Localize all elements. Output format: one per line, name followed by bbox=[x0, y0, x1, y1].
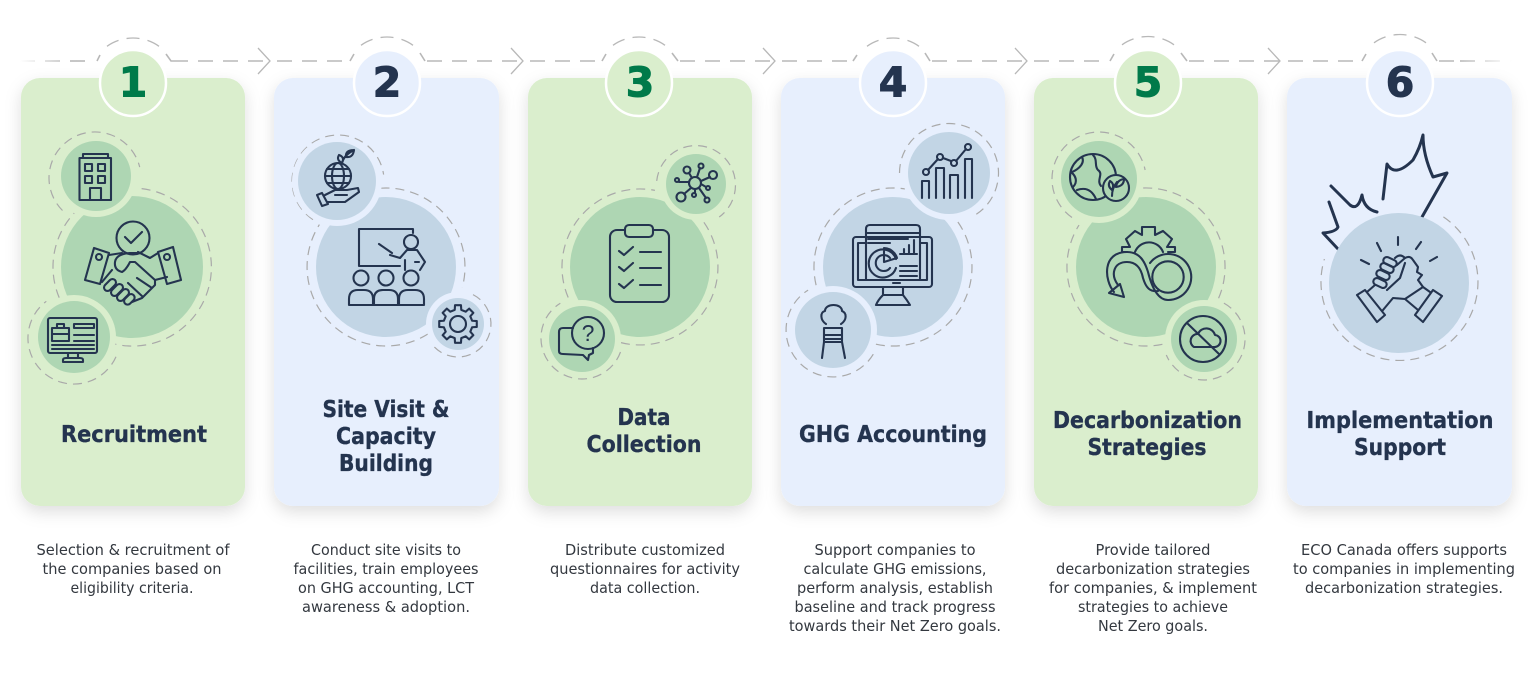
title: Site Visit & Capacity Building: Building bbox=[339, 451, 433, 477]
description: step 6: ECO Canada offers supports bbox=[1301, 541, 1507, 559]
description: step 1 bbox=[36, 541, 230, 597]
description: step 4: calculate GHG emissions, bbox=[804, 560, 986, 578]
step number 5: 5 bbox=[1134, 58, 1162, 106]
description: step 4: Support companies to bbox=[814, 541, 976, 559]
description: step 1: eligibility criteria. bbox=[70, 579, 194, 597]
icon cluster: handshake, building, job monitor bbox=[28, 132, 211, 384]
step number 4 bbox=[860, 50, 926, 116]
step number 3: 3 bbox=[626, 58, 654, 106]
description: step 5: Net Zero goals. bbox=[1098, 617, 1208, 635]
description: step 6 bbox=[1293, 541, 1515, 597]
description: step 3: questionnaires for activity bbox=[550, 560, 740, 578]
description: step 5: Provide tailored bbox=[1096, 541, 1210, 559]
description: step 2: facilities, train employees bbox=[294, 560, 479, 578]
description: step 2: Conduct site visits to bbox=[311, 541, 461, 559]
title: Data Collection: Collection bbox=[586, 432, 702, 458]
step number 2 bbox=[354, 50, 420, 116]
title: Data Collection bbox=[586, 405, 702, 458]
step number 4: 4 bbox=[879, 58, 907, 106]
description: step 6: to companies in implementing bbox=[1293, 560, 1515, 578]
step number 1: 1 bbox=[119, 58, 147, 106]
icon cluster: presenter, globe in hand, gear bbox=[292, 135, 491, 357]
panel: step 6 implementation support bbox=[1287, 50, 1512, 506]
title: Implementation Support: Support bbox=[1354, 435, 1446, 461]
description: step 3: data collection. bbox=[590, 579, 700, 597]
description: step 3: Distribute customized bbox=[565, 541, 725, 559]
panel: step 3 data collection bbox=[528, 50, 752, 506]
description: step 5: strategies to achieve bbox=[1078, 598, 1228, 616]
icon cluster: gear loop, leaf globe, no cloud bbox=[1052, 132, 1245, 380]
description: step 6: decarbonization strategies. bbox=[1305, 579, 1503, 597]
description: step 2 bbox=[294, 541, 479, 616]
step number 5 bbox=[1115, 50, 1181, 116]
description: step 5: for companies, & implement bbox=[1049, 579, 1257, 597]
title: Data Collection: Data bbox=[618, 405, 670, 431]
icon cluster: clipboard, network, question chat bbox=[541, 146, 735, 379]
title: Decarbonization Strategies: Strategies bbox=[1088, 435, 1206, 461]
description: step 5 bbox=[1049, 541, 1257, 635]
description: step 2: on GHG accounting, LCT bbox=[298, 579, 475, 597]
description: step 3 bbox=[550, 541, 740, 597]
panel: step 1 recruitment bbox=[21, 50, 245, 506]
step number 2: 2 bbox=[373, 58, 401, 106]
step number 6 bbox=[1367, 50, 1433, 116]
title: GHG Accounting: GHG Accounting bbox=[799, 422, 987, 448]
panel: step 5 decarbonization strategies bbox=[1034, 50, 1258, 506]
title: Site Visit & Capacity Building: Site Visit & bbox=[322, 397, 450, 423]
description: step 5: decarbonization strategies bbox=[1056, 560, 1250, 578]
description: step 4: baseline and track progress bbox=[794, 598, 996, 616]
title: Site Visit & Capacity Building bbox=[322, 397, 450, 477]
description: step 4: towards their Net Zero goals. bbox=[789, 617, 1001, 635]
title: Implementation Support bbox=[1306, 408, 1494, 461]
title: Site Visit & Capacity Building: Capacity bbox=[336, 424, 436, 450]
dashed process connector with arrows bbox=[20, 35, 1512, 74]
step number 3 bbox=[606, 50, 672, 116]
step number 1 bbox=[100, 50, 166, 116]
icon cluster: dashboard monitor, bar chart, smokestack bbox=[786, 124, 998, 377]
title: Decarbonization Strategies bbox=[1053, 408, 1242, 461]
icon cluster: clasped hands with burst bbox=[1321, 135, 1478, 360]
title: Recruitment: Recruitment bbox=[61, 422, 207, 448]
description: step 4: perform analysis, establish bbox=[797, 579, 993, 597]
title: Decarbonization Strategies: Decarbonization bbox=[1053, 408, 1242, 434]
description: step 4 bbox=[789, 541, 1001, 635]
icon cluster: clipboard, network, question chat: ? bbox=[582, 320, 594, 346]
panel: step 4 GHG accounting bbox=[781, 50, 1005, 506]
description: step 1: Selection & recruitment of bbox=[36, 541, 230, 559]
panel: step 2 site visit bbox=[274, 50, 499, 506]
title: Implementation Support: Implementation bbox=[1306, 408, 1494, 434]
description: step 1: the companies based on bbox=[42, 560, 222, 578]
description: step 2: awareness & adoption. bbox=[302, 598, 470, 616]
step number 6: 6 bbox=[1386, 58, 1414, 106]
